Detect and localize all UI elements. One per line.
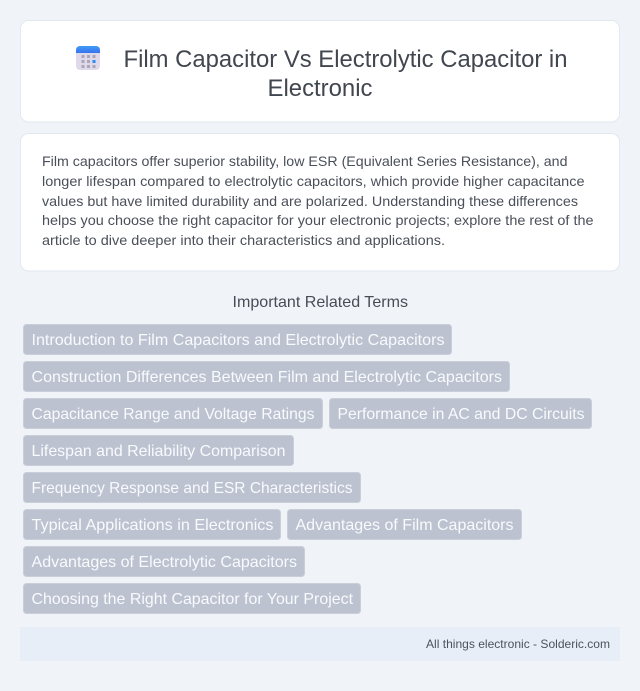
tag: Lifespan and Reliability Comparison [32, 443, 286, 460]
tag: Advantages of Film Capacitors [296, 517, 514, 534]
tag: Advantages of Electrolytic Capacitors [32, 554, 297, 571]
summary text: article to dive deeper into their characteristics and applications. [42, 232, 445, 248]
tag: Frequency Response and ESR Characteristics [32, 480, 352, 497]
footer [20, 627, 620, 661]
title: Film Capacitor Vs Electrolytic Capacitor in [124, 46, 568, 73]
tag [24, 472, 360, 502]
title: Electronic [268, 75, 372, 102]
tag [24, 324, 452, 354]
tag [24, 398, 322, 428]
summary text: Film capacitors offer superior stability, low ESR (Equivalent Series Resistance), and [42, 153, 568, 169]
tag list [24, 324, 592, 614]
heading: important related terms: Important Related Terms [232, 294, 408, 311]
tag [24, 362, 510, 392]
tag [24, 436, 294, 466]
summary text [42, 153, 594, 248]
title [124, 46, 568, 102]
tag: Performance in AC and DC Circuits [338, 406, 584, 423]
icon: calendar [76, 46, 100, 70]
summary text: helps you choose the right capacitor for your electronic projects; explore the rest of the [42, 212, 594, 228]
tag [24, 584, 360, 614]
summary text: longer lifespan compared to electrolytic capacitors, which provide higher capacitance [42, 173, 585, 189]
tag [24, 546, 304, 576]
tag: Capacitance Range and Voltage Ratings [32, 406, 314, 423]
tag: Typical Applications in Electronics [32, 517, 274, 534]
footer: All things electronic - Solderic.com [426, 637, 610, 651]
tag: Introduction to Film Capacitors and Electrolytic Capacitors [32, 332, 444, 349]
panel: title header [20, 20, 620, 122]
tag [330, 398, 592, 428]
summary text: values but have limited durability and are polarized. Understanding these differences [42, 193, 578, 209]
tag [24, 510, 280, 540]
tag [288, 510, 522, 540]
panel: summary paragraph [20, 134, 620, 271]
tag: Choosing the Right Capacitor for Your Project [32, 591, 354, 608]
tag: Construction Differences Between Film and Electrolytic Capacitors [32, 369, 502, 386]
